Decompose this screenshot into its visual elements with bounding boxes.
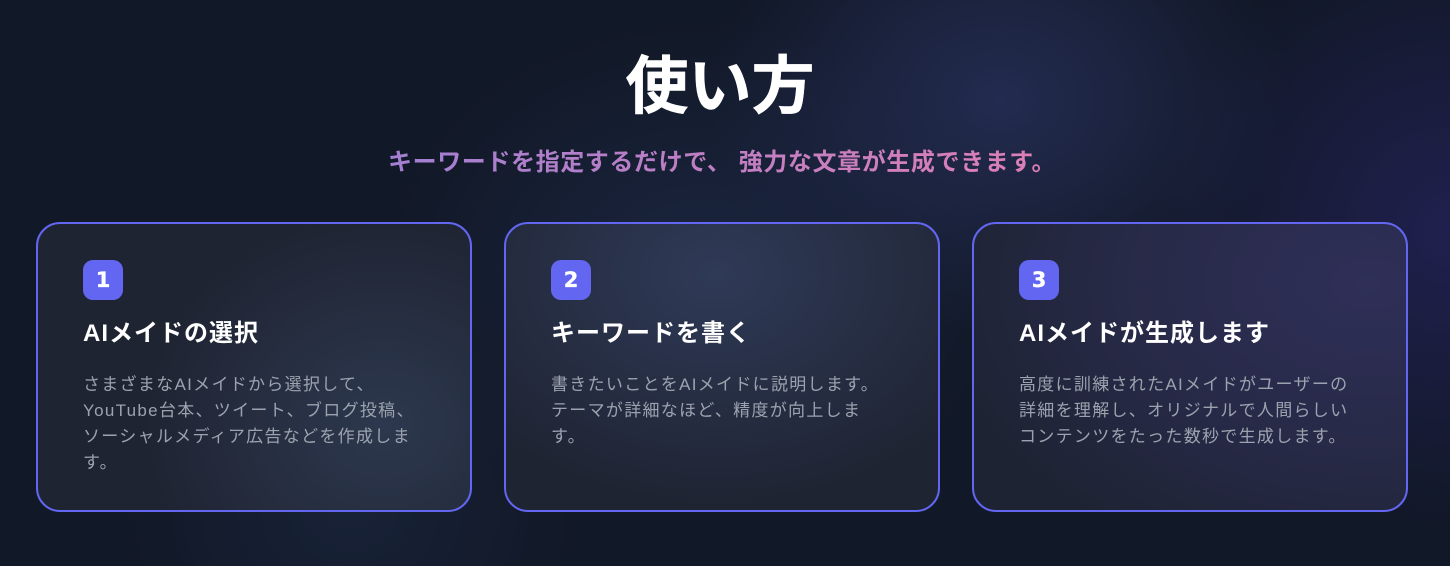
title: 使い方 <box>626 52 814 122</box>
step 2 heading: キーワードを書く <box>551 320 751 347</box>
panel: step 1 <box>36 222 472 512</box>
step 1 description: ソーシャルメディア広告などを作成しま <box>83 427 411 446</box>
step number badge 1: 1 <box>96 268 110 292</box>
step 3 description <box>1019 375 1348 446</box>
subtitle: キーワードを指定するだけで、 強力な文章が生成できます。 <box>388 149 1056 176</box>
step 1 description: YouTube台本、ツイート、ブログ投稿、 <box>83 401 415 420</box>
step number badge 2 <box>551 260 591 300</box>
step 3 heading: AIメイドが生成します <box>1019 320 1270 347</box>
step number badge 3: 3 <box>1032 268 1046 292</box>
step 2 description <box>551 375 879 446</box>
step number badge 3 <box>1019 260 1059 300</box>
step 2 description: テーマが詳細なほど、精度が向上しま <box>551 401 861 420</box>
step number badge 1 <box>83 260 123 300</box>
step number badge 2: 2 <box>564 268 578 292</box>
step 3 description: 詳細を理解し、オリジナルで人間らしい <box>1019 401 1348 420</box>
step 1 heading: AIメイドの選択 <box>83 320 259 347</box>
panel: step 3 <box>972 222 1408 512</box>
step 1 description: す。 <box>83 453 118 472</box>
step 3 description: コンテンツをたった数秒で生成します。 <box>1019 427 1347 446</box>
step 1 description <box>83 375 415 472</box>
step 2 description: 書きたいことをAIメイドに説明します。 <box>551 375 879 394</box>
step 3 description: 高度に訓練されたAIメイドがユーザーの <box>1019 375 1348 394</box>
step 1 description: さまざまなAIメイドから選択して、 <box>83 375 375 394</box>
step 2 description: す。 <box>551 427 586 446</box>
panel: step 2 <box>504 222 940 512</box>
